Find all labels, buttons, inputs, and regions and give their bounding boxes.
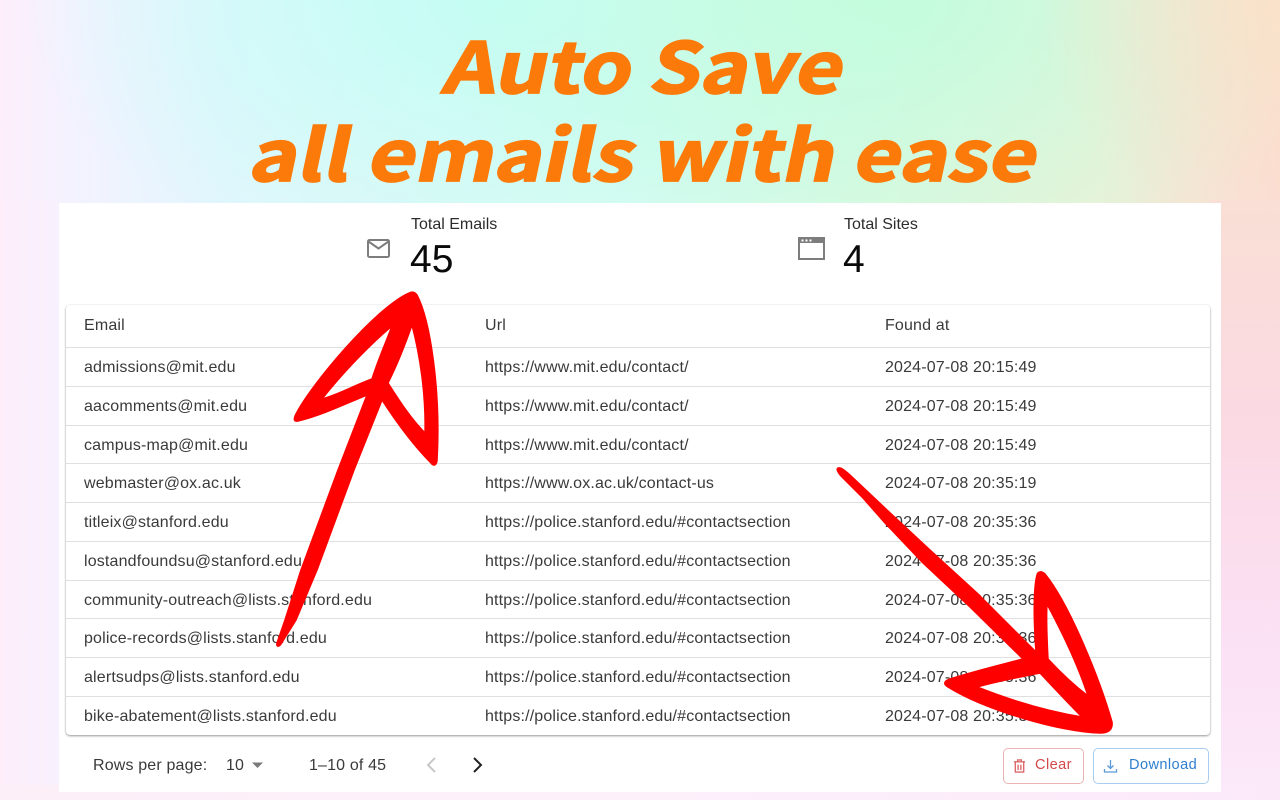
row 3 (66, 426, 1210, 464)
button: clear (1003, 748, 1084, 784)
row 1: 2024-07-08 20:15:49 (885, 359, 1037, 376)
number: 4: 4 (843, 238, 865, 281)
row 9: 2024-07-08 20:35:36 (885, 669, 1037, 686)
row 5: https://police.stanford.edu/#contactsection (485, 514, 791, 531)
row 3: https://www.mit.edu/contact/ (485, 436, 689, 454)
row 4: 2024-07-08 20:35:19 (885, 475, 1037, 492)
icon: envelope (367, 239, 390, 258)
background left strip (0, 200, 70, 800)
row 7: community-outreach@lists.stanford.edu (84, 592, 372, 608)
icon: dropdown caret (252, 762, 263, 768)
arrow: down to download button (837, 468, 1112, 733)
row 7: 2024-07-08 20:35:36 (885, 592, 1037, 608)
row 8 (66, 619, 1210, 658)
row 4: https://www.ox.ac.uk/contact-us (485, 475, 714, 492)
row 10: bike-abatement@lists.stanford.edu (84, 708, 337, 725)
icon: trash (1014, 759, 1026, 773)
row 10: https://police.stanford.edu/#contactsection (485, 708, 791, 725)
stat: total emails (367, 216, 497, 281)
icon: download (1104, 760, 1118, 773)
icon: next page (473, 757, 482, 773)
row 1 (66, 348, 1210, 387)
row 9: alertsudps@lists.stanford.edu (84, 669, 300, 686)
row 6 (66, 542, 1210, 581)
row 6: 2024-07-08 20:35:36 (885, 553, 1037, 570)
stat: total sites (798, 216, 918, 281)
table header (66, 305, 1210, 348)
background bottom strip (0, 785, 1280, 800)
table header: Email (84, 317, 125, 334)
row 7: https://police.stanford.edu/#contactsection (485, 592, 791, 608)
title: Auto Save (435, 13, 857, 114)
panel: dashboard (59, 203, 1221, 792)
table header: Url (485, 317, 506, 334)
number: 45: 45 (410, 238, 453, 281)
table: emails (66, 305, 1210, 735)
button: download (1093, 748, 1209, 784)
row 5: 2024-07-08 20:35:36 (885, 514, 1037, 531)
row 10: 2024-07-08 20:35:36 (885, 708, 1037, 725)
row 2: 2024-07-08 20:15:49 (885, 398, 1037, 415)
row 5: titleix@stanford.edu (84, 514, 229, 531)
row 9: https://police.stanford.edu/#contactsection (485, 669, 791, 686)
row 7 (66, 581, 1210, 619)
rows per page label: Rows per page: (93, 757, 207, 774)
row 2 (66, 387, 1210, 426)
label: total sites: Total Sites (844, 216, 918, 233)
title (243, 13, 1051, 200)
title: all emails with ease (243, 101, 1051, 200)
clear label: Clear (1035, 757, 1072, 773)
download label: Download (1129, 757, 1197, 773)
label: total emails: Total Emails (411, 216, 497, 233)
row 3: 2024-07-08 20:15:49 (885, 436, 1037, 454)
row 8: 2024-07-08 20:35:36 (885, 630, 1037, 647)
page range: 1–10 of 45 (309, 757, 386, 774)
table header: Found at (885, 317, 949, 334)
row 1: https://www.mit.edu/contact/ (485, 359, 689, 376)
background right strip (1210, 200, 1280, 800)
rows per page value: 10 (226, 757, 244, 774)
row 5 (66, 503, 1210, 542)
row 6: lostandfoundsu@stanford.edu (84, 553, 302, 570)
row 4 (66, 464, 1210, 503)
icon: previous page (426, 757, 436, 773)
icon: browser window (798, 237, 825, 260)
row 8: https://police.stanford.edu/#contactsection (485, 630, 791, 647)
row 10 (84, 708, 1037, 725)
row 6: https://police.stanford.edu/#contactsection (485, 553, 791, 570)
arrow: up to total emails (277, 292, 438, 646)
row 4: webmaster@ox.ac.uk (84, 475, 241, 492)
row 8: police-records@lists.stanford.edu (84, 630, 327, 647)
row 2: aacomments@mit.edu (84, 398, 247, 415)
row 9 (66, 658, 1210, 697)
row 3: campus-map@mit.edu (84, 436, 248, 454)
row 1: admissions@mit.edu (84, 359, 236, 376)
row 2: https://www.mit.edu/contact/ (485, 398, 689, 415)
pagination (93, 757, 482, 774)
